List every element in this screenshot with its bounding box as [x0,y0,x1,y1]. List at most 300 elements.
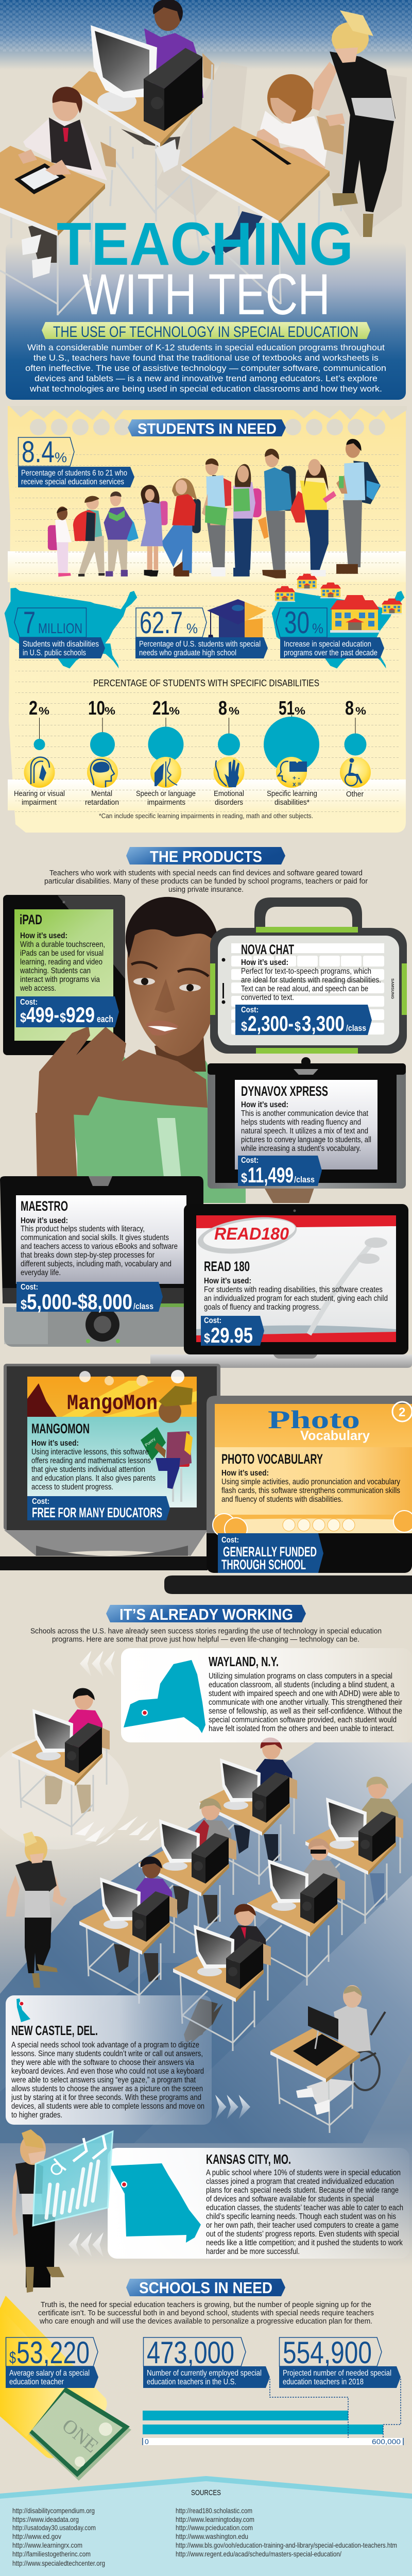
Photo Vocabulary text: PHOTO VOCABULARY [221,1451,323,1467]
desk with computer [71,25,202,147]
column: specific learning disabilities: 51 [279,698,295,719]
student: navy sweater [199,1737,297,1885]
stat: average salary: Average salary of a special [9,2369,90,2378]
stat: 8.4 percent [18,435,134,487]
nose [154,979,175,1013]
stat: 62.7 percent [135,605,268,658]
products intro: using private insurance. [168,886,244,894]
stat: 8.4 percent: Percentage of students 6 to 21 who [21,469,127,478]
heading: students in need: STUDENTS IN NEED [138,421,277,437]
iPad text: watching. Students can [20,967,91,975]
column: speech or language impairments: 21 [152,698,169,719]
column: mental retardation [85,698,119,807]
student 7 [233,464,262,577]
student 4 [141,485,168,577]
Maestro text: and teachers access to various eBooks and software [21,1242,178,1251]
Read 180 text: goals of fluency and tracking progress. [204,1303,321,1312]
Maestro text: MAESTRO [21,1198,68,1214]
arm under hand [36,1113,77,1180]
Read 180 text: an individualized program for each student, giving each child [204,1294,388,1303]
New Castle story: lessons. Since many students couldn’t write or call out answers, [11,2049,203,2058]
Mangomon text: MANGOMON [31,1421,90,1436]
Read 180 cost: $ [204,1330,210,1346]
stat: currently employed: 473,000 [147,2335,234,2370]
Maestro text: How it’s used: [21,1216,68,1225]
iPad text [20,912,105,993]
Nova Chat cost: 3,300 [302,1011,345,1036]
heading: the products: THE PRODUCTS [150,848,262,866]
stat: projected needed [279,2335,401,2388]
column: specific learning disabilities: + - [293,774,300,782]
device: Nova Chat [210,897,407,1054]
device: Mangomon monitor [0,1364,220,1570]
column: emotional disorders: % [229,705,239,717]
panel: Kansas City, Mo.: KANSAS CITY, MO. [206,2151,291,2167]
chair of left student [100,142,116,167]
intro paragraph: With a considerable number of K-12 students in special education programs throughout [27,343,385,352]
New Castle story: devices, all students were able to complete lessons and move on [11,2102,204,2111]
iPad text: How it’s used: [20,931,67,940]
Photo Vocabulary cost: GENERALLY FUNDED [223,1544,317,1560]
stat: 8.4 percent: 8.4 [22,435,55,469]
map panels and stats row [5,574,404,668]
student 8 [258,449,296,578]
Read 180 text: For students with reading disabilities, this software creates [204,1285,383,1294]
left source list: https://www.ideadata.org [12,2515,79,2523]
stat: 30 percent: programs over the past decade [284,649,377,657]
panel: New Castle, Del.: NEW CASTLE, DEL. [11,2023,98,2038]
column: emotional disorders: 8 [218,698,227,719]
left source list: http://www.ed.gov [12,2532,61,2540]
column: mental retardation: retardation [85,799,119,807]
Read 180 logo [195,1212,299,1259]
products intro: Teachers who work with students with special needs can find devices and software geared toward [49,869,363,877]
stat: 7 million: Students with disabilities [23,640,99,649]
iPad cost: $ [20,1010,26,1025]
schools intro: who care enough and will use the devices available to personalize a progressive education plan for them. [39,2317,372,2326]
iPad cost: 499- [26,1003,59,1027]
student 1 [48,506,72,577]
left desk with tablet [0,146,105,236]
student 2 [73,496,105,577]
Read 180 text: How it’s used: [204,1277,251,1285]
hero blue panel [6,242,406,400]
Mangomon logo: MangoMon [67,1391,158,1416]
head [127,899,218,1056]
right student legs [211,211,263,258]
stat: projected needed: Projected number of needed special [283,2369,391,2378]
Mangomon text: How it’s used: [31,1439,79,1448]
stat: projected needed: education teachers in 2018 [283,2378,364,2386]
column: speech or language impairments: % [169,705,180,717]
stat: average salary: 53,220 [16,2335,90,2370]
Dynavox text [241,1083,371,1153]
column: other: 8 [345,698,354,719]
Nova Chat text: Text can be read aloud, and speech can be [241,985,368,993]
student 3 [104,492,139,577]
column: emotional disorders: disorders [215,799,243,807]
map: US left [5,588,137,668]
Dynavox cost: 11,499 [248,1163,294,1187]
hair [126,897,219,958]
Dynavox text: natural speech. It utilizes a mix of text and [241,1127,368,1136]
stat: currently employed [143,2335,270,2388]
icon: money in yellow folder [0,2296,131,2481]
New Castle story [11,2041,204,2120]
Nova Chat cost [235,1005,372,1036]
iPad cost [16,996,119,1027]
column: emotional disorders [213,698,244,807]
stat: 30 percent: % [312,621,323,636]
column: speech or language impairments: Speech or language [136,790,196,798]
axis labels: 600,000 [372,2437,401,2446]
Read 180 cost: Cost: [204,1316,221,1325]
heading: it's already working: IT’S ALREADY WORKING [119,1605,293,1623]
Nova Chat text: converted to text. [241,993,294,1002]
mouth [146,1021,179,1036]
device: Maestro [0,1176,203,1347]
iPad cost: 929 [66,1003,95,1027]
icon: money in yellow folder: ONE [58,2415,102,2457]
legs and shoes of purple student [154,139,180,173]
stat: 8.4 percent: receive special education services [21,478,124,486]
working intro: programs. Here are some that prove just how helpful — even life-changing — technology can be. [52,1635,359,1643]
left desk legs [0,170,112,315]
Dynavox cost [238,1156,322,1187]
left source list: http://familiestogetherinc.com [12,2550,91,2558]
arrows: diagonal to New Castle [75,1816,159,1846]
left student torso [23,87,107,180]
right source list [176,2506,397,2558]
iPad text: learning, reading and video [20,958,102,967]
Read 180 cost [201,1316,264,1347]
Dynavox cost: $ [241,1170,247,1185]
header gradient with dot pattern [0,0,412,70]
working intro: Schools across the U.S. have already seen success stories regarding the use of technology in special education [30,1627,382,1635]
Nova Chat cost: Cost: [241,1006,259,1014]
iPad text: web access. [20,984,56,993]
column: specific learning disabilities: disabilities* [274,799,310,807]
intro paragraph: devices and tablets — is a new and innovative trend among educators. Let’s explore [35,374,377,383]
Photo Vocabulary logo: 2 [399,1405,405,1419]
stat: 62.7 percent: Percentage of U.S. students with special [139,640,261,649]
left source list: http://www.specialedtechcenter.org [12,2559,105,2567]
Kansas City story [206,2168,403,2256]
holographic panel [33,2131,113,2226]
Photo Vocabulary logo [268,1402,412,1443]
Mangomon cost: FREE FOR MANY EDUCATORS [32,1505,162,1520]
intro paragraph [25,343,386,394]
teacher standing [6,1832,67,1988]
bar chart: teachers employed versus needed [143,2379,403,2446]
hero illustration: classroom with students and teacher [0,0,407,315]
device: Read 180 laptop [150,1204,412,1368]
chart heading: PERCENTAGE OF STUDENTS WITH SPECIFIC DISABILITIES [93,678,319,688]
schools intro: certificate isn’t. To be successful both in and beyond school, students with special needs require teachers [38,2309,374,2317]
teacher [312,10,396,237]
student 6 [202,459,231,577]
teacher with holographic panel [12,2129,113,2293]
left source list [12,2506,105,2567]
right source list: http://www.washington.edu [176,2532,248,2540]
map: US right with schools [272,574,404,668]
Dynavox text: pictures to convey language to students, all [241,1136,371,1144]
title: TEACHING [57,210,353,278]
polo shirt [72,1051,246,1203]
neck shadow [154,1036,206,1072]
panel: New Castle, Del. [6,1995,212,2125]
Dynavox text: while increasing a student’s vocabulary. [241,1144,361,1153]
New Castle story: just by staring at it for three seconds. With these programs and [11,2093,201,2102]
Maestro text: communication and social skills. It gives students [21,1233,169,1242]
column: mental retardation: % [105,705,115,717]
column: speech or language impairments [136,698,196,807]
Nova Chat cost: $ [295,1019,301,1034]
New Castle story: were able to select answers using “eye gaze,” a program that [11,2076,196,2084]
student: wheelchair [270,1985,385,2133]
iPad text: iPAD [20,912,42,927]
device: Nova Chat: SAMSUNG [390,978,394,999]
New Castle story: allows students to choose the answer as a picture on the screen [11,2084,203,2093]
Mangomon text [31,1421,156,1492]
student: tie and blazer [173,1904,271,2051]
iPad text: interact with programs via [20,975,100,984]
Maestro cost: 5,000-$8,000 [27,1290,132,1314]
stat: average salary: $ [9,2348,16,2367]
Wayland story [209,1672,402,1733]
Maestro cost: Cost: [21,1283,38,1292]
left source list: http://disabilitycompendium.org [12,2506,95,2515]
Nova Chat text: How it’s used: [241,958,288,967]
Maestro text: different subjects, including math, vocabulary and [21,1260,171,1268]
Read 180 text: READ 180 [204,1259,250,1274]
Photo Vocabulary cost [218,1533,323,1573]
illustration: line of ten students [48,439,381,578]
Photo Vocabulary cost: THROUGH SCHOOL [221,1557,306,1572]
chair back [202,53,214,80]
student 10 [336,439,381,574]
Mangomon character: Poetry [144,1436,156,1448]
Mangomon text: and education plans. It also gives parents [31,1474,156,1483]
intro paragraph: the U.S., teachers have found that the traditional use of textbooks and worksheets is [33,353,379,363]
Read 180 cost: 29.95 [211,1323,253,1347]
left source list: http://usatoday30.usatoday.com [12,2523,96,2532]
torn spiral holes [9,406,407,435]
Read 180 text [204,1259,388,1312]
Kansas City story: of devices and software available for students in special [206,2195,374,2204]
Photo Vocabulary text: and fluency of students with disabilities. [221,1495,343,1504]
Maestro cost: /class [133,1301,153,1311]
Dynavox text: DYNAVOX XPRESS [241,1083,328,1099]
right source list: http://read180.scholastic.com [176,2506,252,2515]
stat: 7 million: MILLION [38,620,82,636]
device: Photo Vocabulary monitor [164,1396,412,1594]
New Castle story: they were able with the software to choose their answers via [11,2058,194,2067]
column: specific learning disabilities [264,698,319,807]
panel: Wayland, N.Y.: WAYLAND, N.Y. [209,1654,279,1669]
stat: 7 million: in U.S. public schools [23,649,86,657]
left student lower legs [22,219,58,278]
Photo Vocabulary text: How it’s used: [221,1469,269,1478]
Read 180 logo: READ180 [214,1224,289,1243]
stat: currently employed: education teachers in the U.S. [147,2378,236,2386]
illustration: boy with green polo [36,897,315,1203]
stat: average salary [6,2335,98,2388]
right student [252,74,327,173]
Mangomon cost: Cost: [32,1497,49,1506]
Dynavox cost: Cost: [241,1156,259,1165]
Photo Vocabulary cost: Cost: [221,1536,239,1545]
hand over iPad [37,1026,126,1115]
ear [212,973,221,1000]
column: specific learning disabilities: % [295,705,305,717]
schools intro: Truth is, the need for special education teachers is growing, but the number of people signing up for the [41,2301,371,2309]
arrows: toward Wayland student [80,1651,115,1676]
Dynavox cost: /class [294,1175,315,1184]
student 9 [290,459,336,577]
iPad cost: each [97,1014,113,1024]
Nova Chat cost: /class [346,1023,366,1033]
elbow [263,1185,315,1203]
student: sunglasses [247,1838,345,1986]
iPad cost: Cost: [20,998,38,1007]
Mangomon text: that give students individual attention [31,1465,145,1474]
icon: mortar board [207,599,267,652]
Nova Chat text: are ideal for students with reading disabilities. [241,976,381,985]
device: Dynavox Xpress [208,1057,406,1189]
column: hearing or visual impairment: impairment [22,799,57,807]
Nova Chat text: Perfect for text-to-speech programs, which [241,967,371,976]
map: Missouri [110,2163,201,2243]
title [57,210,353,327]
Maestro cost [16,1282,163,1314]
column: hearing or visual impairment: 2 [29,698,38,719]
column: emotional disorders: Emotional [214,790,244,798]
Nova Chat cost: 2,300- [248,1011,294,1036]
right desk legs [191,124,345,304]
stat: 62.7 percent: % [186,621,198,636]
keypad grid [231,956,384,1035]
student: red vest [139,1798,236,1945]
second hand under chin [91,1049,208,1108]
classroom background [0,1736,412,2267]
stat: 30 percent: Increase in special education [284,640,371,649]
New Castle story: to higher grades. [11,2111,62,2120]
eyes [131,962,209,991]
panel: Wayland, N.Y. [121,1648,412,1742]
Nova Chat cost: $ [241,1019,247,1034]
intro paragraph: what technologies are being used in special education classrooms and how they work. [29,384,382,394]
student: striped shirt [305,1776,403,1924]
New Castle story: keyboard devices. And even those who could not use a keyboard [11,2067,204,2076]
column: hearing or visual impairment: % [39,705,49,717]
iPad cost: $ [60,1010,66,1025]
footnote: *Can include specific learning impairments in reading, math and other subjects. [99,812,313,820]
column: speech or language impairments: impairments [147,799,185,807]
desk legs top [110,64,212,222]
stat: 62.7 percent: needs who graduate high school [139,649,236,657]
Maestro text: that breaks down step-by-step processes for [21,1251,154,1260]
Mangomon text: offers reading and mathematics lessons [31,1456,151,1465]
products intro: particular disabilities. Many of these products can be funded by school programs, teachers or paid for [44,877,368,886]
column: specific learning disabilities: Specific learning [267,790,317,798]
panel: students in need notebook [8,406,407,833]
arrows: toward Kansas City teacher [68,2232,104,2257]
stat: 7 million [14,605,105,658]
Mangomon text: Using interactive lessons, this software [31,1448,149,1456]
Nova Chat text: NOVA CHAT [241,942,294,957]
iPad text: With a durable touchscreen, [20,940,105,949]
stat: 7 million: 7 [23,605,36,640]
column: other [340,698,371,799]
student: pink shirt [12,1688,110,1835]
sources section [0,2476,412,2576]
device: iPad [3,895,126,1115]
column: hearing or visual impairment: Hearing or visual [14,790,65,798]
Dynavox text: How it’s used: [241,1100,288,1109]
products intro [44,869,368,894]
right source list: http://www.learningtoday.com [176,2515,254,2523]
Maestro cost: $ [21,1297,27,1312]
iPad text: iPads can be used for visual [20,949,104,958]
Nova Chat text [241,942,381,1002]
student in purple at computer [121,0,203,149]
Photo Vocabulary logo: Vocabulary [300,1428,370,1443]
column: specific learning disabilities: x = [293,781,301,788]
left source list: http://www.learningrx.com [12,2541,82,2549]
map: New York [124,1660,205,1733]
Maestro text: This product helps students with literacy, [21,1225,145,1233]
Dynavox text: helps students with reading fluency and [241,1118,361,1127]
intro paragraph: often ineffective. The use of assistive technology — computer software, communication [25,364,386,373]
title: WITH TECH [82,262,330,327]
stat: currently employed: Number of currently employed special [147,2369,262,2378]
column: mental retardation: 10 [88,698,105,719]
chart: percentage of students with specific disabilities [14,678,371,820]
student 5 [162,478,201,577]
panel: Kansas City, Mo. [108,2148,409,2259]
Mangomon character [141,1386,193,1502]
Mangomon cost [27,1496,170,1520]
column: other: Other [346,790,364,799]
arrows: toward wheelchair student [215,2095,250,2119]
stat: 8.4 percent: % [55,450,67,465]
right source list: http://www.regent.edu/acad/schedu/masters-special-education/ [176,2550,341,2558]
stat: 30 percent: 30 [284,605,310,640]
polo placket [157,1118,183,1195]
stat: 62.7 percent: 62.7 [140,605,183,640]
right chair [317,116,344,155]
column: mental retardation: Mental [91,790,112,798]
stat: average salary: education teacher [9,2378,64,2386]
axis labels: 0 [145,2437,149,2446]
New Castle story: A special needs school took advantage of a program to digitize [11,2041,199,2049]
schools intro [38,2301,374,2326]
Photo Vocabulary logo: Photo [268,1405,360,1434]
stat: projected needed: 554,900 [283,2335,372,2370]
Dynavox text: This is another communication device that [241,1109,369,1118]
map: Delaware [16,1998,30,2022]
classroom students at computers [12,1688,403,2133]
Maestro text: everyday life. [21,1268,61,1277]
Mangomon text: access to student progress. [31,1483,113,1492]
Maestro text [21,1198,178,1277]
student: purple shirt [79,1857,177,2004]
right source list: http://www.pcieducation.com [176,2523,253,2532]
Kansas City story: harder and be more successful. [206,2247,300,2256]
axis labels [145,2437,401,2446]
heading: schools in need: SCHOOLS IN NEED [139,2279,272,2297]
